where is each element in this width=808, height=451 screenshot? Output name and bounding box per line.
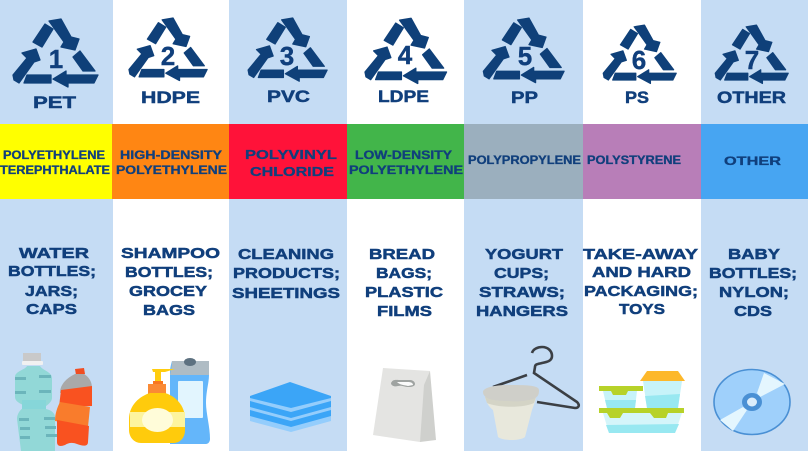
- uses: PS: AND HARD: [592, 264, 691, 281]
- icon: recycling symbol 3: 3: [280, 41, 294, 71]
- panel: LDPE: [347, 0, 464, 451]
- uses: OTHER: BOTTLES;: [709, 265, 797, 282]
- uses: PS: [583, 246, 698, 318]
- uses: PVC: SHEETINGS: [232, 285, 340, 302]
- band: low-density polyethylene: POLYETHYLENE: [349, 165, 463, 177]
- uses: PVC: [232, 246, 340, 302]
- panel: HDPE: [112, 0, 229, 451]
- icon: recycling symbol 1: 1: [49, 44, 63, 74]
- uses: HDPE: BOTTLES;: [125, 264, 213, 281]
- band: low-density polyethylene: LOW-DENSITY: [355, 150, 452, 162]
- uses: PS: TAKE-AWAY: [583, 246, 698, 263]
- uses: PET: BOTTLES;: [8, 263, 96, 280]
- icon: recycling symbol 7: 7: [745, 45, 759, 75]
- icon: recycling symbol 4: [365, 18, 447, 84]
- label: HDPE: HDPE: [141, 88, 200, 107]
- uses: PET: [8, 245, 96, 318]
- uses: PET: JARS;: [25, 283, 78, 300]
- label: OTHER: OTHER: [717, 88, 786, 107]
- uses: LDPE: BREAD: [369, 246, 435, 263]
- panel: PVC: [229, 0, 347, 451]
- uses: PS: PACKAGING;: [584, 283, 698, 300]
- label: PVC: PVC: [267, 87, 310, 106]
- icon: compact disc: [714, 370, 790, 434]
- uses: LDPE: BAGS;: [376, 265, 432, 282]
- band: high-density polyethylene: [112, 124, 229, 199]
- band: polypropylene: POLYPROPYLENE: [468, 155, 581, 167]
- uses: OTHER: NYLON;: [719, 284, 789, 301]
- band: low-density polyethylene: [347, 124, 464, 199]
- panel: OTHER: [701, 0, 808, 451]
- uses: LDPE: FILMS: [377, 303, 432, 320]
- icon: paper bag: [373, 368, 436, 442]
- icon: plastic bottles: [15, 353, 92, 451]
- uses: LDPE: [365, 246, 443, 320]
- band: polyvinyl chloride: [229, 124, 347, 199]
- uses: PP: CUPS;: [494, 265, 549, 282]
- icon: recycling symbol 5: 5: [518, 41, 532, 71]
- icon: recycling symbol 7: [715, 25, 788, 84]
- label: LDPE: LDPE: [378, 87, 429, 106]
- band: other: OTHER: [724, 156, 782, 168]
- uses: HDPE: BAGS: [143, 302, 195, 319]
- icon: recycling symbol 6: [603, 25, 676, 84]
- uses: OTHER: CDS: [734, 303, 772, 320]
- uses: HDPE: SHAMPOO: [121, 245, 220, 262]
- icon: recycling symbol 3: [248, 18, 327, 81]
- icon: recycling symbol 1: [13, 19, 98, 87]
- uses: PS: TOYS: [619, 301, 665, 318]
- uses: PET: WATER: [19, 245, 89, 262]
- uses: HDPE: GROCEY: [129, 283, 207, 300]
- panel: PS: [583, 0, 701, 451]
- band: high-density polyethylene: POLYETHYLENE: [116, 165, 227, 177]
- uses: HDPE: [121, 245, 220, 319]
- uses: PP: [476, 246, 568, 320]
- icon: recycling symbol 2: [129, 18, 207, 81]
- panel: PET: [0, 0, 113, 451]
- label: PET: PET: [33, 93, 77, 112]
- uses: PP: HANGERS: [476, 303, 568, 320]
- band: polyethylene terephthalate: TEREPHTHALATE: [0, 165, 110, 177]
- uses: PVC: CLEANING: [238, 246, 334, 263]
- band: high-density polyethylene: HIGH-DENSITY: [120, 150, 222, 162]
- band: polyvinyl chloride: POLYVINYL: [245, 147, 337, 162]
- uses: PVC: PRODUCTS;: [233, 265, 340, 282]
- band: polystyrene: POLYSTYRENE: [587, 155, 681, 167]
- band: polyethylene terephthalate: [0, 124, 112, 199]
- icon: recycling symbol 5: [483, 18, 564, 83]
- uses: PP: STRAWS;: [479, 284, 565, 301]
- uses: OTHER: [709, 246, 797, 320]
- band: polyethylene terephthalate: POLYETHYLENE: [3, 150, 105, 162]
- icon: recycling symbol 2: 2: [161, 41, 175, 71]
- band: polyvinyl chloride: CHLORIDE: [250, 164, 334, 179]
- icon: hanger and yogurt cup: [483, 347, 579, 440]
- uses: OTHER: BABY: [728, 246, 780, 263]
- label: PS: PS: [625, 88, 649, 107]
- icon: food containers: [599, 371, 685, 433]
- label: PP: PP: [511, 88, 538, 107]
- uses: LDPE: PLASTIC: [365, 284, 443, 301]
- band: polypropylene: [464, 124, 583, 199]
- band: other: [701, 124, 808, 199]
- icon: soap and shampoo bottles: [129, 358, 210, 444]
- uses: PET: CAPS: [26, 301, 77, 318]
- icon: stacked sheets: [250, 382, 331, 432]
- icon: recycling symbol 4: 4: [398, 40, 413, 70]
- uses: PP: YOGURT: [485, 246, 563, 263]
- panel: PP: [464, 0, 583, 451]
- band: polystyrene: [583, 124, 701, 199]
- icon: recycling symbol 6: 6: [632, 45, 646, 75]
